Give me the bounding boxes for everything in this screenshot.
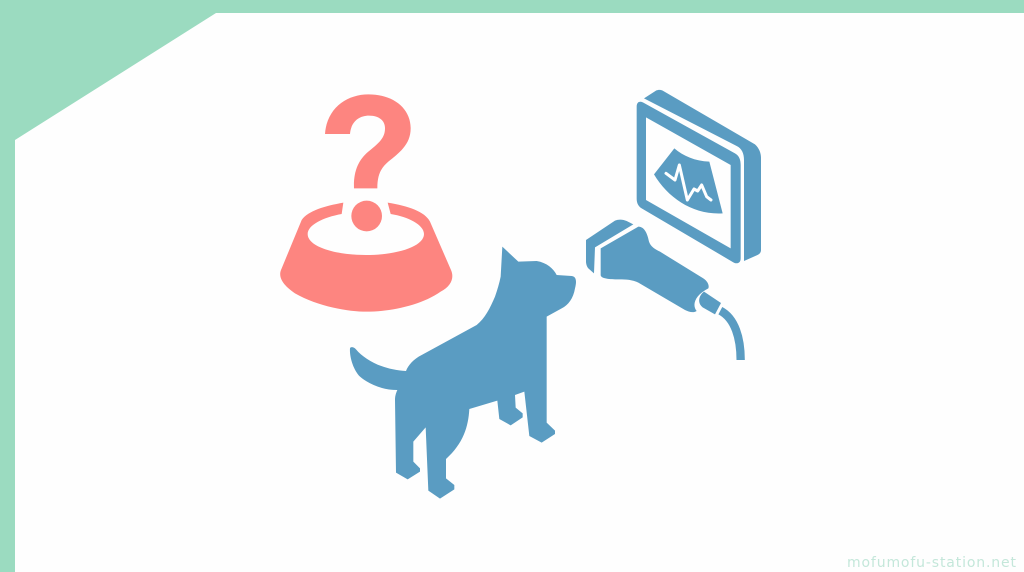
- icon: ultrasound probe: [586, 220, 741, 360]
- question mark: [325, 94, 411, 231]
- probe cable: [720, 311, 741, 360]
- food bowl: [280, 203, 452, 312]
- monitor screen frame: [637, 102, 741, 263]
- probe connector: [699, 292, 721, 314]
- monitor casing: [644, 90, 761, 261]
- icon: dog silhouette: [350, 247, 576, 499]
- icon: ultrasound monitor: [637, 90, 761, 263]
- icon: question mark over food bowl: [280, 94, 452, 312]
- probe body: [601, 227, 709, 312]
- watermark: mofumofu-station.net: [847, 555, 1016, 571]
- probe head: [586, 220, 633, 273]
- ultrasound scan image: [654, 148, 723, 213]
